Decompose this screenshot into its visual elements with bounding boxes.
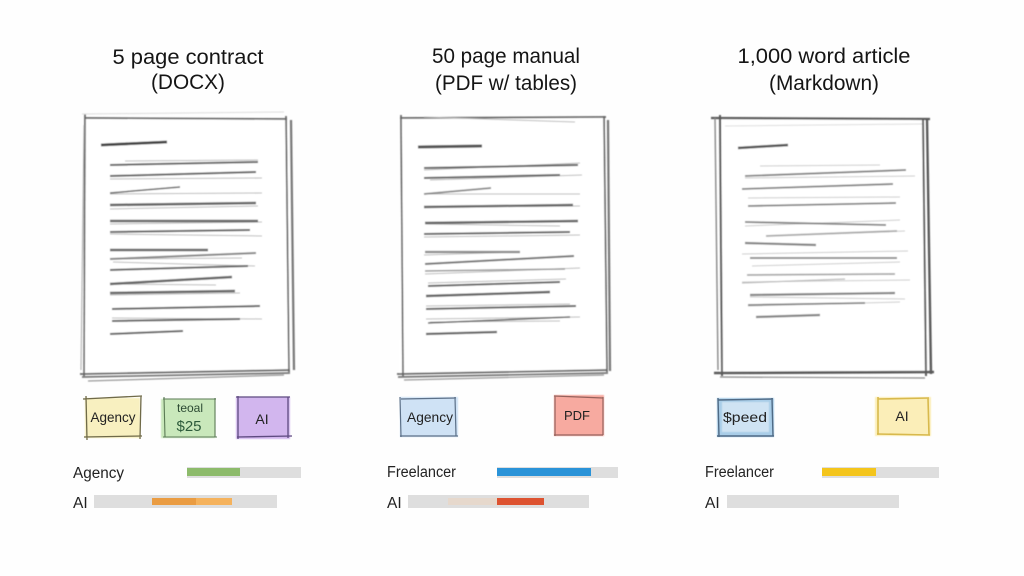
heading: 50 page manual bbox=[432, 45, 580, 95]
heading: 50 page manual: (PDF w/ tables) bbox=[435, 72, 577, 95]
sticky note: total $25 bbox=[161, 397, 217, 438]
heading: 5 page contract bbox=[112, 46, 264, 94]
sticky note: total $25: teoal bbox=[177, 401, 203, 415]
sticky note: Agency: Agency bbox=[90, 409, 136, 425]
sticky note: AI: AI bbox=[255, 411, 269, 427]
sticky note: Agency: Agency bbox=[407, 409, 453, 425]
heading: 50 page manual: 50 page manual bbox=[432, 45, 580, 68]
panel: 50 page manual bbox=[387, 45, 618, 512]
panel: 5 page contract bbox=[73, 46, 301, 512]
heading: 1,000 word article bbox=[738, 45, 910, 95]
sticky note: Agency bbox=[83, 396, 142, 440]
heading: 1,000 word article: 1,000 word article bbox=[738, 45, 910, 68]
heading: 1,000 word article: (Markdown) bbox=[769, 72, 879, 95]
document sketch: manual bbox=[397, 115, 610, 380]
bar row: Agency: Agency bbox=[73, 465, 124, 482]
sticky note: Speed: $peed bbox=[723, 409, 767, 425]
sticky note: total $25: $25 bbox=[176, 418, 202, 435]
bar row: AI bbox=[387, 495, 589, 512]
bar row: Agency bbox=[73, 465, 301, 482]
sticky note: Speed bbox=[717, 398, 774, 437]
sticky note: AI bbox=[236, 396, 292, 439]
bar row: AI: AI bbox=[73, 495, 88, 512]
bar row: Freelancer bbox=[705, 464, 939, 481]
bar row: AI: AI bbox=[387, 495, 402, 512]
sticky note: Agency bbox=[400, 397, 458, 437]
bar row: AI bbox=[73, 495, 277, 512]
bar row: Freelancer: Freelancer bbox=[387, 464, 456, 481]
heading: 5 page contract: 5 page contract bbox=[112, 46, 264, 69]
sticky note: PDF bbox=[554, 395, 604, 436]
heading: 5 page contract: (DOCX) bbox=[151, 71, 225, 94]
sticky note: AI bbox=[875, 397, 931, 436]
sticky note: PDF: PDF bbox=[564, 408, 590, 423]
bar row: AI bbox=[705, 495, 899, 512]
bar row: Freelancer bbox=[387, 464, 618, 481]
bar row: Freelancer: Freelancer bbox=[705, 464, 774, 481]
document sketch: contract bbox=[80, 112, 294, 381]
bar row: AI: AI bbox=[705, 495, 720, 512]
document sketch: article bbox=[711, 115, 934, 378]
panel: 1,000 word article bbox=[705, 45, 939, 512]
sticky note: AI: AI bbox=[895, 408, 909, 424]
